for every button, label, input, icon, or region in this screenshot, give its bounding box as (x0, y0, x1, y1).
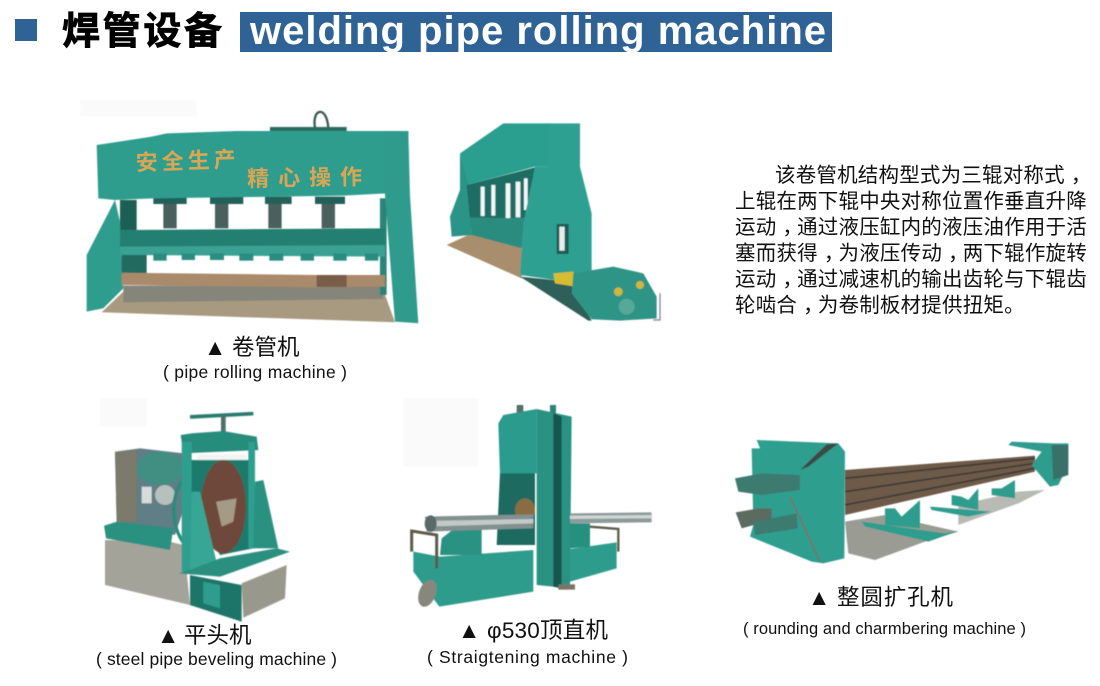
caption: pipe rolling machine: ( pipe rolling machine ) (163, 362, 347, 382)
caption: rounding and chambering machine: ( rounding and charmbering machine ) (743, 620, 1026, 638)
caption: rounding and chambering machine (743, 585, 1026, 638)
photo: pipe rolling machine side view (447, 123, 660, 321)
caption: straightening machine: ( Straigtening machine ) (427, 647, 628, 667)
photo: pipe rolling machine front view (80, 100, 418, 323)
explanatory paragraph: 运动 ，通过液压缸内的液压油作用于活 (735, 216, 1087, 239)
caption: straightening machine: φ530顶直机 (487, 618, 608, 643)
sign text on machine: 精心操作 (247, 164, 362, 191)
explanatory paragraph: 塞而获得 ，为液压传动 ，两下辊作旋转 (735, 242, 1087, 265)
heading: chinese title: 焊管设备 (62, 11, 222, 53)
caption: rounding and chambering machine: ▲ (808, 585, 830, 610)
caption: steel pipe beveling machine: 平头机 (184, 623, 252, 648)
explanatory paragraph: 上辊在两下辊中央对称位置作垂直升降 (735, 190, 1087, 213)
sign text on machine (135, 147, 362, 191)
caption: steel pipe beveling machine (96, 623, 337, 669)
caption: rounding and chambering machine: 整圆扩孔机 (837, 585, 953, 610)
icon: blue square bullet (15, 19, 37, 41)
photo: steel pipe beveling machine (100, 398, 290, 622)
caption: pipe rolling machine: 卷管机 (232, 335, 300, 360)
photo: rounding and chambering machine (735, 440, 1068, 563)
heading: english title badge: welding pipe rolling machine (249, 9, 826, 53)
caption: pipe rolling machine (163, 335, 347, 382)
explanatory paragraph: 该卷管机结构型式为三辊对称式 ， (775, 164, 1092, 187)
caption: steel pipe beveling machine: ( steel pipe beveling machine ) (96, 649, 337, 669)
explanatory paragraph (735, 164, 1092, 317)
caption: steel pipe beveling machine: ▲ (157, 623, 179, 648)
explanatory paragraph: 轮啮合 ，为卷制板材提供扭矩。 (735, 294, 1025, 317)
explanatory paragraph: 运动 ，通过减速机的输出齿轮与下辊齿 (735, 268, 1087, 291)
title bar (15, 9, 832, 53)
caption: straightening machine: ▲ (458, 618, 480, 643)
caption: pipe rolling machine: ▲ (204, 335, 226, 360)
photo: straightening machine (403, 398, 652, 609)
caption: straightening machine (427, 618, 628, 667)
sign text on machine: 安全生产 (135, 147, 236, 175)
